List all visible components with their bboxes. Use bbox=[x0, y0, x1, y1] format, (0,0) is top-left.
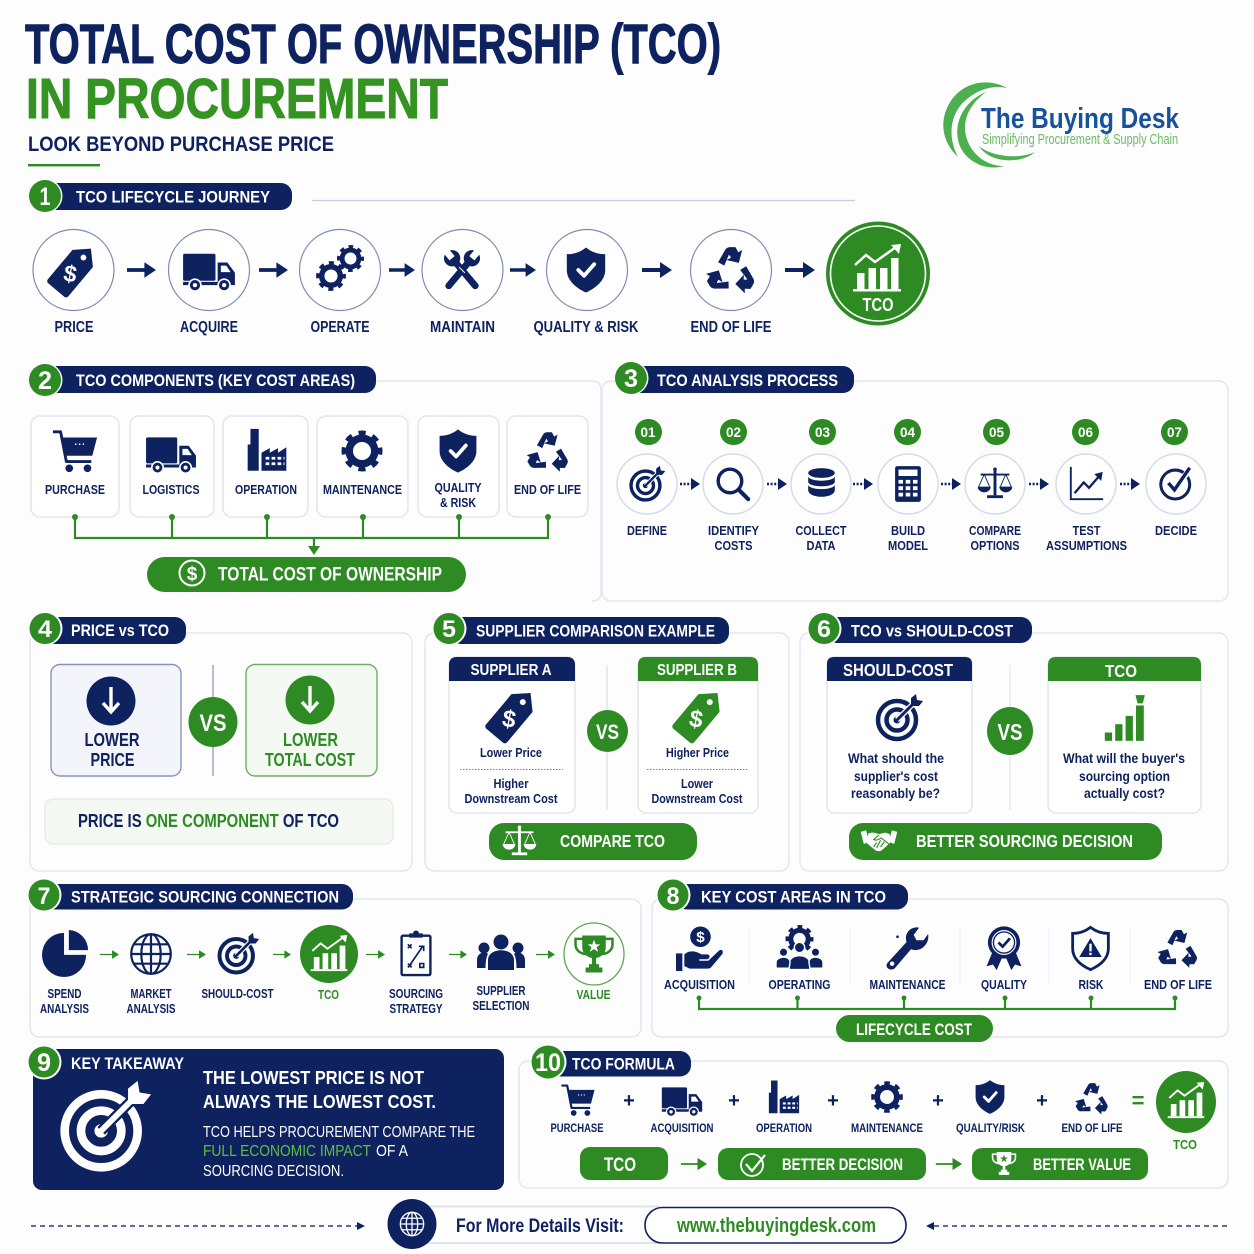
takeaway heading: ALWAYS THE LOWEST COST. bbox=[203, 1091, 436, 1112]
pill: better sourcing decision: BETTER SOURCING DECISION bbox=[916, 831, 1133, 851]
step: spend analysis: ANALYSIS bbox=[40, 1002, 89, 1016]
step: supplier selection: SELECTION bbox=[472, 999, 530, 1013]
takeaway body: SOURCING DECISION. bbox=[203, 1163, 344, 1180]
area: end of life: END OF LIFE bbox=[1144, 978, 1212, 992]
section 2 header: TCO COMPONENTS (KEY COST AREAS) bbox=[76, 371, 355, 390]
panel: tco vs should-cost bbox=[800, 612, 1228, 871]
section 5 header bbox=[432, 612, 729, 646]
title: TOTAL COST OF OWNERSHIP (TCO) bbox=[25, 12, 721, 75]
card: maintenance: MAINTENANCE bbox=[323, 483, 402, 497]
section 7 header: STRATEGIC SOURCING CONNECTION bbox=[71, 888, 339, 906]
arrow bbox=[259, 262, 288, 278]
url pill bbox=[645, 1208, 906, 1243]
area: maintenance bbox=[870, 927, 946, 992]
step: market analysis bbox=[126, 934, 176, 1016]
icon: target bbox=[65, 1081, 151, 1167]
area: end of life bbox=[1144, 930, 1212, 992]
subtitle: LOOK BEYOND PURCHASE PRICE bbox=[28, 133, 334, 156]
area: quality: QUALITY bbox=[981, 978, 1028, 992]
step: tco bbox=[300, 925, 358, 1002]
step: quality and risk: QUALITY & RISK bbox=[534, 319, 639, 336]
logo: The Buying Desk: Simplifying Procurement & Supply Chain bbox=[982, 132, 1178, 148]
section 4 header: 4 bbox=[38, 616, 53, 643]
card: logistics: LOGISTICS bbox=[142, 483, 200, 497]
step: end of life bbox=[690, 230, 772, 336]
section 1 header: TCO LIFECYCLE JOURNEY bbox=[76, 188, 271, 206]
pill: better decision: BETTER DECISION bbox=[782, 1156, 903, 1174]
vs badge bbox=[987, 665, 1033, 810]
card: should-cost: supplier's cost bbox=[854, 768, 938, 784]
step: end of life: END OF LIFE bbox=[690, 319, 772, 336]
step 05 compare options: COMPARE bbox=[969, 524, 1021, 538]
callout: price is one component: PRICE IS ONE COMPONENT OF TCO bbox=[78, 811, 339, 831]
arrow bbox=[642, 262, 672, 278]
section 5 header: SUPPLIER COMPARISON EXAMPLE bbox=[476, 622, 715, 640]
step: acquire bbox=[168, 230, 250, 336]
step 07 decide: DECIDE bbox=[1155, 524, 1197, 538]
term: maintenance bbox=[851, 1083, 923, 1135]
step: price bbox=[33, 230, 114, 336]
step: value bbox=[564, 923, 624, 1002]
takeaway heading: THE LOWEST PRICE IS NOT bbox=[203, 1067, 425, 1088]
plus signs: + bbox=[1036, 1090, 1048, 1112]
pill: total cost of ownership: $ bbox=[187, 564, 198, 585]
section 10 header bbox=[530, 1044, 691, 1080]
pill: better sourcing decision bbox=[849, 823, 1162, 860]
vs badge bbox=[587, 665, 628, 810]
panel: tco components bbox=[31, 416, 588, 592]
connector: components to total bbox=[72, 514, 551, 555]
term: acquisition: ACQUISITION bbox=[650, 1123, 714, 1135]
section 6 header: 6 bbox=[817, 616, 831, 643]
section 9 badge bbox=[26, 1044, 62, 1080]
step: tco result bbox=[826, 222, 930, 326]
step 03 collect data bbox=[791, 419, 851, 553]
step 07 decide: 07 bbox=[1167, 424, 1182, 440]
pill: tco bbox=[580, 1147, 668, 1180]
card: purchase: PURCHASE bbox=[45, 483, 105, 497]
step 04 build model: 04 bbox=[900, 424, 915, 440]
card: should-cost: SHOULD-COST bbox=[843, 660, 953, 680]
area: maintenance: MAINTENANCE bbox=[870, 978, 946, 992]
plus signs: + bbox=[827, 1090, 839, 1112]
card: supplier a: Downstream Cost bbox=[464, 792, 558, 806]
term: operation bbox=[756, 1080, 812, 1135]
title: IN PROCUREMENT bbox=[26, 67, 448, 131]
url pill: www.thebuyingdesk.com bbox=[676, 1215, 876, 1237]
card: lower price: PRICE bbox=[90, 750, 134, 770]
step 03 collect data: 03 bbox=[815, 424, 830, 440]
title bbox=[25, 12, 721, 131]
step 07 decide bbox=[1146, 419, 1206, 538]
step 02 identify costs bbox=[703, 419, 763, 553]
connector: lifecycle bbox=[696, 996, 1178, 1009]
panel: tco formula bbox=[519, 1044, 1228, 1188]
step 01 define: 01 bbox=[640, 424, 656, 440]
panel: key takeaway bbox=[26, 1044, 504, 1190]
step: maintain: MAINTAIN bbox=[430, 319, 495, 336]
step: acquire: ACQUIRE bbox=[180, 319, 238, 336]
flow arrows bbox=[100, 950, 555, 959]
step 04 build model: MODEL bbox=[888, 539, 928, 553]
result: tco bbox=[1156, 1071, 1216, 1152]
section 8 header bbox=[656, 878, 908, 912]
footer bbox=[31, 1199, 1228, 1249]
term: purchase: PURCHASE bbox=[550, 1123, 604, 1135]
equals sign: = bbox=[1132, 1088, 1144, 1113]
card: end of life bbox=[507, 416, 588, 517]
card: quality and risk bbox=[418, 416, 499, 517]
takeaway body bbox=[203, 1124, 475, 1180]
step: should-cost: SHOULD-COST bbox=[202, 987, 274, 1001]
term: acquisition bbox=[650, 1087, 714, 1135]
section 1 header bbox=[28, 179, 292, 213]
area: operating: OPERATING bbox=[768, 978, 830, 992]
area: risk: RISK bbox=[1078, 978, 1104, 992]
step: supplier selection bbox=[472, 934, 530, 1013]
arrow bbox=[389, 263, 415, 277]
term: quality and risk bbox=[956, 1080, 1026, 1135]
step: sourcing strategy bbox=[389, 930, 443, 1016]
card: quality and risk: QUALITY bbox=[434, 481, 482, 495]
section 2 header bbox=[28, 363, 376, 397]
term: quality and risk: QUALITY/RISK bbox=[956, 1123, 1026, 1135]
pill: better value bbox=[972, 1148, 1148, 1180]
pill: total cost of ownership bbox=[147, 557, 466, 592]
card: purchase bbox=[31, 416, 119, 517]
section 5 header: 5 bbox=[442, 616, 456, 643]
card: operation: OPERATION bbox=[235, 483, 297, 497]
card: lower price: LOWER bbox=[84, 730, 140, 750]
step: market analysis: MARKET bbox=[130, 987, 172, 1001]
section 6 header: TCO vs SHOULD-COST bbox=[851, 622, 1014, 640]
section 1 header: 1 bbox=[40, 183, 51, 211]
plus signs: + bbox=[728, 1090, 740, 1112]
step 02 identify costs: 02 bbox=[726, 424, 741, 440]
card: supplier a: SUPPLIER A bbox=[470, 662, 552, 679]
area: acquisition: ACQUISITION bbox=[664, 978, 735, 992]
pill: lifecycle cost: LIFECYCLE COST bbox=[856, 1021, 972, 1039]
panel: lifecycle journey bbox=[33, 222, 930, 336]
logo: The Buying Desk: The Buying Desk bbox=[981, 103, 1180, 135]
panel: price vs tco bbox=[28, 612, 412, 871]
callout: price is one component bbox=[45, 799, 393, 844]
card: operation bbox=[223, 416, 308, 517]
area: quality bbox=[981, 926, 1028, 992]
step 06 test assumptions bbox=[1046, 419, 1127, 553]
section 2 header: 2 bbox=[38, 367, 52, 395]
pill: better value: BETTER VALUE bbox=[1033, 1156, 1131, 1174]
arrow bbox=[785, 262, 815, 278]
takeaway body: FULL ECONOMIC IMPACT bbox=[203, 1143, 371, 1160]
card: supplier a: Lower Price bbox=[480, 746, 542, 760]
card: end of life: END OF LIFE bbox=[514, 483, 581, 497]
section 3 header: 3 bbox=[624, 365, 638, 393]
footer label: For More Details Visit: bbox=[456, 1216, 624, 1237]
card: logistics bbox=[130, 416, 214, 517]
card: tco bbox=[1048, 657, 1201, 813]
pill: compare tco bbox=[489, 823, 697, 860]
panel: tco analysis process bbox=[602, 361, 1228, 601]
step 01 define bbox=[617, 419, 677, 538]
card: should-cost bbox=[827, 657, 972, 813]
takeaway heading bbox=[203, 1067, 436, 1112]
section 9 badge: 9 bbox=[37, 1049, 51, 1077]
card: supplier b: SUPPLIER B bbox=[657, 662, 737, 679]
step: quality and risk bbox=[534, 230, 639, 336]
vs badge: VS bbox=[200, 710, 226, 737]
card: supplier b: Downstream Cost bbox=[652, 792, 743, 806]
area: operating bbox=[768, 927, 830, 992]
section 8 header: 8 bbox=[666, 883, 680, 910]
card: lower total cost: TOTAL COST bbox=[265, 750, 355, 770]
panel: key cost areas bbox=[652, 878, 1228, 1042]
step 01 define: DEFINE bbox=[627, 524, 667, 538]
step: spend analysis bbox=[40, 930, 89, 1016]
term: end of life bbox=[1062, 1083, 1123, 1135]
card: tco: actually cost? bbox=[1084, 785, 1165, 801]
arrow bbox=[936, 1158, 962, 1170]
card: lower total cost: LOWER bbox=[283, 730, 338, 750]
heading: key takeaway: KEY TAKEAWAY bbox=[71, 1054, 185, 1073]
section 3 header: TCO ANALYSIS PROCESS bbox=[657, 371, 838, 390]
arrow bbox=[127, 262, 156, 278]
step 05 compare options: 05 bbox=[989, 424, 1004, 440]
term: operation: OPERATION bbox=[756, 1123, 812, 1135]
step 04 build model bbox=[878, 419, 938, 553]
term: purchase bbox=[550, 1086, 604, 1135]
card: supplier a: Higher bbox=[494, 777, 529, 791]
step: tco: TCO bbox=[318, 988, 339, 1002]
takeaway body: OF A bbox=[376, 1143, 409, 1160]
step 02 identify costs: COSTS bbox=[714, 539, 752, 553]
takeaway body: TCO HELPS PROCUREMENT COMPARE THE bbox=[203, 1124, 475, 1141]
term: maintenance: MAINTENANCE bbox=[851, 1123, 923, 1135]
step 02 identify costs: IDENTIFY bbox=[708, 524, 760, 538]
step 04 build model: BUILD bbox=[891, 524, 925, 538]
step: operate bbox=[300, 230, 380, 336]
section 6 header bbox=[808, 612, 1032, 646]
area: risk bbox=[1073, 927, 1108, 992]
card: supplier a bbox=[449, 657, 575, 813]
step 06 test assumptions: ASSUMPTIONS bbox=[1046, 539, 1127, 553]
pill: tco: TCO bbox=[604, 1155, 636, 1176]
section 10 header: TCO FORMULA bbox=[572, 1054, 675, 1074]
step: market analysis: ANALYSIS bbox=[126, 1002, 176, 1016]
section 4 header bbox=[28, 612, 186, 646]
pill: total cost of ownership: TOTAL COST OF OWNERSHIP bbox=[218, 564, 442, 586]
plus signs: + bbox=[932, 1090, 944, 1112]
card: quality and risk: & RISK bbox=[440, 496, 476, 510]
panel: supplier comparison bbox=[425, 612, 789, 871]
card: supplier b: Higher Price bbox=[666, 746, 729, 760]
area: acquisition bbox=[664, 926, 735, 992]
vs badge: VS bbox=[998, 719, 1022, 745]
card: supplier b: Lower bbox=[681, 777, 713, 791]
step 03 collect data: DATA bbox=[806, 539, 836, 553]
card: tco: TCO bbox=[1105, 661, 1137, 681]
section 4 header: PRICE vs TCO bbox=[71, 621, 169, 640]
step: should-cost bbox=[202, 933, 274, 1001]
step 06 test assumptions: 06 bbox=[1078, 424, 1093, 440]
card: should-cost: reasonably be? bbox=[851, 785, 940, 801]
panel: strategic sourcing connection bbox=[28, 878, 641, 1037]
section 8 header: KEY COST AREAS IN TCO bbox=[701, 888, 886, 906]
step: value: VALUE bbox=[576, 988, 610, 1002]
section 7 header bbox=[28, 878, 353, 912]
step: price: PRICE bbox=[54, 319, 94, 336]
card: tco: What will the buyer's bbox=[1063, 750, 1185, 766]
vs badge: VS bbox=[596, 721, 619, 744]
card: tco: sourcing option bbox=[1079, 768, 1170, 784]
step 03 collect data: COLLECT bbox=[796, 524, 847, 538]
icon: globe bbox=[388, 1199, 436, 1249]
step: operate: OPERATE bbox=[310, 319, 370, 336]
step: tco result: TCO bbox=[862, 295, 894, 315]
step: sourcing strategy: SOURCING bbox=[389, 987, 443, 1001]
card: supplier b bbox=[638, 657, 758, 813]
arrow bbox=[681, 1158, 707, 1170]
step: supplier selection: SUPPLIER bbox=[476, 984, 526, 998]
term: end of life: END OF LIFE bbox=[1062, 1123, 1123, 1135]
step: maintain bbox=[422, 230, 503, 336]
step 05 compare options bbox=[965, 419, 1025, 553]
plus signs bbox=[623, 1090, 1048, 1112]
step 05 compare options: OPTIONS bbox=[970, 539, 1020, 553]
card: lower price bbox=[51, 664, 181, 776]
arrow bbox=[510, 263, 536, 277]
pill: lifecycle cost bbox=[836, 1015, 993, 1042]
card: maintenance bbox=[317, 416, 408, 517]
pill: better decision bbox=[718, 1148, 926, 1180]
section 10 header: 10 bbox=[535, 1049, 561, 1077]
section 3 header bbox=[614, 361, 854, 395]
card: should-cost: What should the bbox=[848, 750, 944, 766]
section 7 header: 7 bbox=[38, 883, 50, 910]
step 06 test assumptions: TEST bbox=[1072, 524, 1101, 538]
step: spend analysis: SPEND bbox=[48, 987, 82, 1001]
process arrows bbox=[680, 478, 1140, 490]
result: tco: TCO bbox=[1173, 1137, 1197, 1152]
step: sourcing strategy: STRATEGY bbox=[390, 1002, 443, 1016]
pill: compare tco: COMPARE TCO bbox=[560, 831, 665, 851]
logo: The Buying Desk bbox=[943, 82, 1180, 168]
card: lower total cost bbox=[246, 664, 377, 776]
plus signs: + bbox=[623, 1090, 635, 1112]
vs badge bbox=[188, 665, 238, 776]
